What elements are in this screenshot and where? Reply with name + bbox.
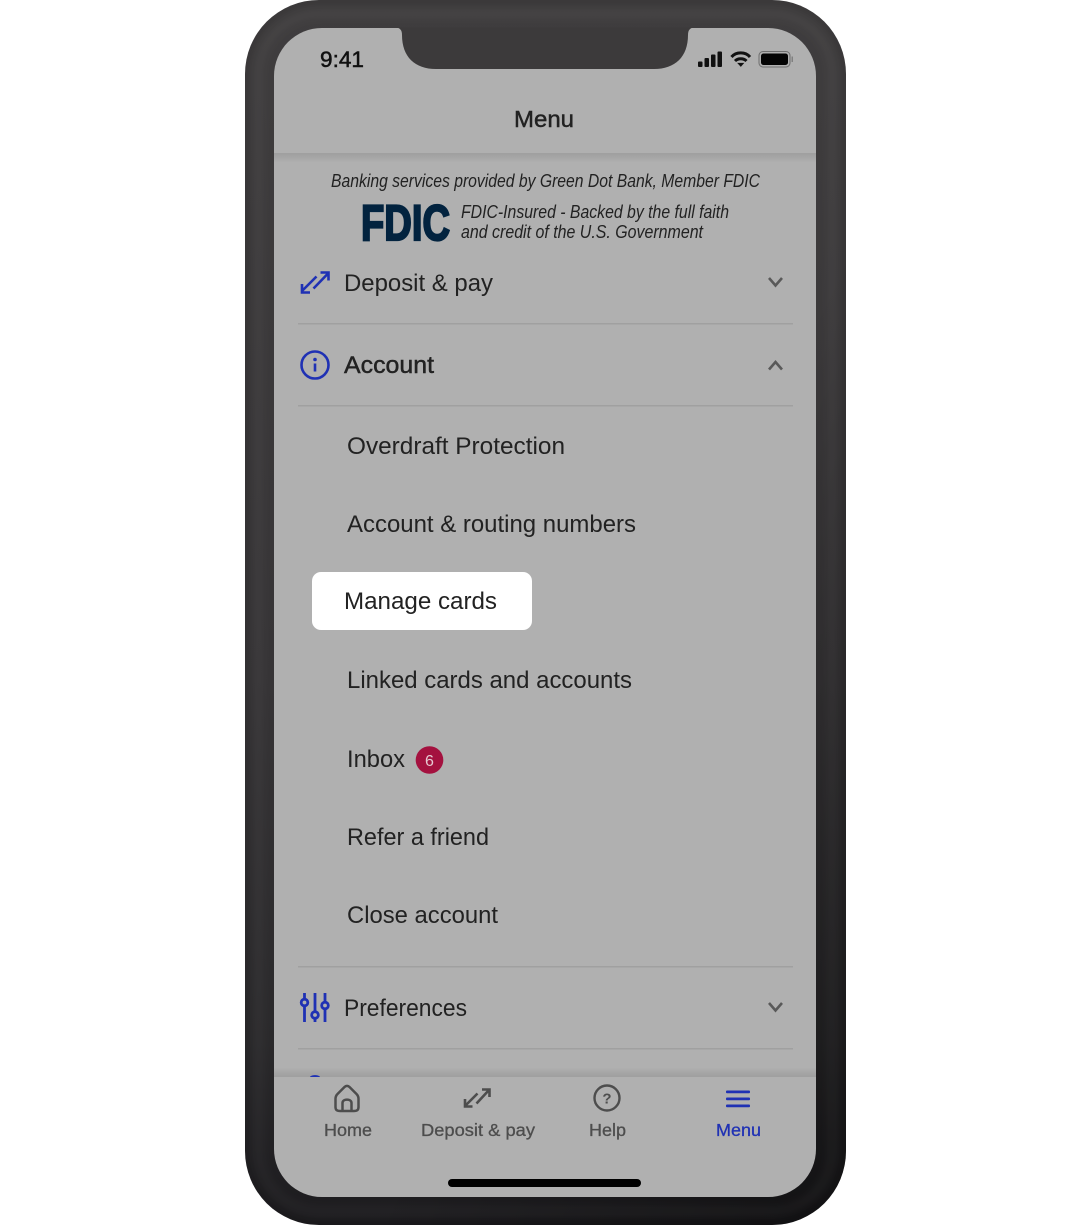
nav item: deposit and pay: Deposit & pay xyxy=(421,1120,535,1140)
icon: chevron down xyxy=(769,278,782,286)
submenu item: inbox with badge xyxy=(347,746,443,774)
icon: help circle: ? xyxy=(602,1090,612,1108)
highlighted item: manage cards xyxy=(312,572,532,630)
icon: info circle xyxy=(302,352,328,378)
submenu item: close account: Close account xyxy=(347,902,498,929)
bottom navigation xyxy=(324,1086,761,1140)
nav item: help: Help xyxy=(589,1120,626,1140)
nav item: help xyxy=(589,1086,626,1140)
nav item: home xyxy=(324,1086,372,1140)
icon: battery xyxy=(759,52,793,67)
menu row: preferences: Preferences xyxy=(344,995,467,1022)
icon: sliders xyxy=(301,993,328,1022)
menu row: account xyxy=(302,352,782,379)
nav item: menu: Menu xyxy=(716,1120,761,1140)
icon: deposit arrows xyxy=(302,272,328,292)
FDIC statement: and credit of the U.S. Government xyxy=(461,221,704,242)
home indicator xyxy=(448,1179,641,1187)
nav item: menu xyxy=(716,1090,761,1140)
icon: chevron up xyxy=(769,362,782,370)
submenu item: inbox with badge: Inbox xyxy=(347,746,405,773)
icon: home xyxy=(336,1086,358,1111)
menu row: account: Account xyxy=(344,352,434,379)
banking disclosure: Banking services provided by Green Dot Bank, Member FDIC xyxy=(331,170,761,191)
highlighted item: manage cards: Manage cards xyxy=(344,588,497,615)
icon: chevron down xyxy=(769,1003,782,1010)
notification badge: 6 xyxy=(425,753,434,770)
partially hidden menu icon xyxy=(310,1075,320,1077)
FDIC statement xyxy=(461,201,729,242)
icon: wifi xyxy=(732,53,750,66)
FDIC logo: FDIC xyxy=(361,195,450,251)
status bar time: 9:41 xyxy=(320,47,364,72)
menu row: deposit and pay xyxy=(302,270,782,297)
icon: signal bars xyxy=(698,52,722,67)
status bar icons xyxy=(698,52,793,67)
notch xyxy=(396,28,694,69)
submenu item: refer a friend: Refer a friend xyxy=(347,824,489,851)
menu row: preferences xyxy=(301,993,782,1022)
submenu item: linked cards and accounts: Linked cards and accounts xyxy=(347,667,632,694)
icon: hamburger xyxy=(726,1090,750,1107)
submenu item: account and routing numbers: Account & routing numbers xyxy=(347,511,636,538)
nav item: deposit and pay xyxy=(421,1090,535,1140)
header title: Menu xyxy=(514,106,574,132)
icon: deposit arrows xyxy=(465,1090,490,1106)
submenu item: overdraft protection: Overdraft Protection xyxy=(347,433,565,460)
phone frame xyxy=(245,0,846,1225)
FDIC statement: FDIC-Insured - Backed by the full faith xyxy=(461,201,729,222)
phone screen xyxy=(274,28,816,1197)
menu row: deposit and pay: Deposit & pay xyxy=(344,270,493,297)
nav item: home: Home xyxy=(324,1120,372,1140)
